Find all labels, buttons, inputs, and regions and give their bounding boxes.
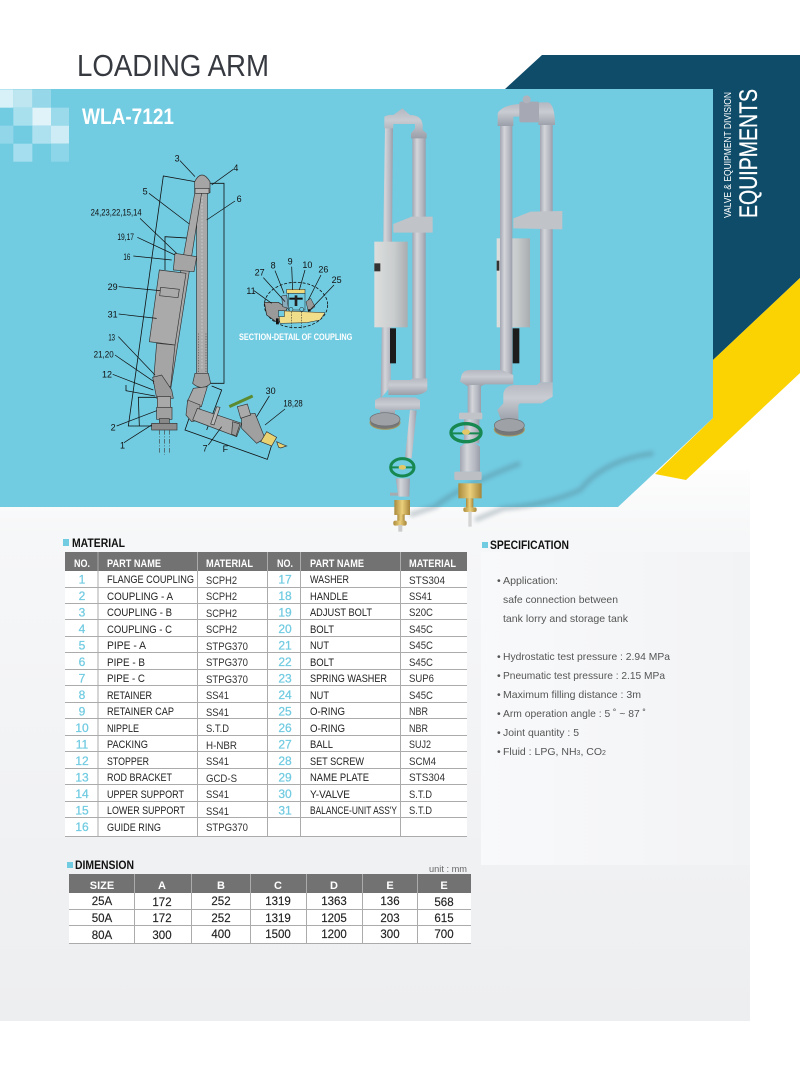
specification list: Pneumatic test pressure : 2.15 MPa <box>503 670 665 682</box>
part number labels: 4 <box>233 163 238 173</box>
column: materials 1-16: H-NBR <box>206 740 237 752</box>
dimension rows: 80A <box>92 930 113 942</box>
table header: MATERIAL <box>206 558 253 570</box>
column: numbers 17-31 <box>278 572 292 818</box>
column: materials 17-31: S20C <box>409 607 433 619</box>
technical drawing of the loading arm <box>91 154 352 459</box>
column: part names 17-31: NUT <box>310 640 329 652</box>
column: numbers 17-31: 23 <box>278 672 292 686</box>
side label: division: VALVE & EQUIPMENT DIVISION <box>722 92 734 218</box>
yellow accent stripe <box>655 278 800 480</box>
column: materials 1-16: GCD-S <box>206 773 237 785</box>
dimension rows: 136 <box>380 896 400 908</box>
column: part names 1-16: COUPLING - C <box>107 624 172 636</box>
dimension table header: C <box>274 880 282 892</box>
part number labels: 16 <box>123 252 130 262</box>
column: materials 1-16: STPG370 <box>206 657 248 669</box>
table header <box>65 552 467 571</box>
column: part names 17-31: HANDLE <box>310 591 348 603</box>
dimension rows: 615 <box>434 913 454 925</box>
unit note: unit : mm <box>429 864 467 875</box>
dimension table header: A <box>158 880 166 892</box>
specification list: Hydrostatic test pressure : 2.94 MPa <box>503 651 670 663</box>
column: part names 1-16: LOWER SUPPORT <box>107 805 185 817</box>
part number labels: 7 <box>203 444 208 454</box>
column: numbers 17-31: 31 <box>278 804 292 818</box>
dimension table header: D <box>330 880 338 892</box>
column: numbers 1-16: 11 <box>76 738 89 752</box>
column: numbers 1-16: 12 <box>75 754 89 768</box>
column: numbers 17-31: 28 <box>278 754 292 768</box>
column: numbers 1-16: 10 <box>75 721 89 735</box>
specification list: • <box>497 746 501 758</box>
dimension rows: 700 <box>434 929 454 941</box>
dimension rows: 1200 <box>321 929 347 941</box>
column: materials 17-31 <box>409 575 445 817</box>
column: numbers 1-16: 4 <box>79 622 86 636</box>
specification list: • <box>497 670 501 682</box>
column: numbers 17-31: 25 <box>278 704 292 718</box>
column: part names 17-31: BALANCE-UNIT ASS'Y <box>310 805 397 817</box>
blue hero panel <box>0 89 713 507</box>
part number labels: 6 <box>237 194 242 204</box>
section detail caption: SECTION-DETAIL OF COUPLING <box>239 332 352 342</box>
part number labels: F <box>223 444 229 454</box>
section detail of coupling <box>264 282 328 328</box>
column: materials 1-16: SS41 <box>206 756 229 768</box>
column: materials 17-31: SS41 <box>409 591 432 603</box>
dimension rows: 1205 <box>321 913 347 925</box>
part number labels: 26 <box>318 265 328 275</box>
model name heading: WLA-7121 <box>82 104 174 129</box>
column: numbers 17-31: 24 <box>278 688 292 702</box>
column: part names 17-31: O-RING <box>310 706 345 718</box>
specification list: • <box>497 689 501 701</box>
part number labels: 8 <box>271 261 276 271</box>
part number labels: 12 <box>102 370 112 380</box>
ground shadows <box>410 453 653 520</box>
dimension table header: E <box>386 880 394 892</box>
part number labels: 2 <box>111 423 116 433</box>
column: materials 17-31: NBR <box>409 706 428 718</box>
column: part names 1-16: FLANGE COUPLING <box>107 574 194 586</box>
column: materials 1-16: SS41 <box>206 690 229 702</box>
table header: PART NAME <box>107 558 161 570</box>
dimension rows: 252 <box>211 896 231 908</box>
table header: NO. <box>74 558 90 570</box>
column: materials 17-31: SUP6 <box>409 673 434 685</box>
column: part names 17-31 <box>310 574 397 817</box>
column: numbers 17-31: 20 <box>278 622 292 636</box>
column: part names 17-31: BALL <box>310 739 333 751</box>
leader lines <box>113 161 334 445</box>
specification list <box>497 575 670 758</box>
column: part names 17-31: BOLT <box>310 657 334 669</box>
column: part names 1-16: COUPLING - B <box>107 607 172 619</box>
specification list: safe connection between <box>503 594 618 606</box>
specification list: Application: <box>503 575 558 587</box>
specification list: Joint quantity : 5 <box>503 727 579 739</box>
page background panel <box>0 470 750 1021</box>
dimension rows: 172 <box>152 913 172 925</box>
column: numbers 1-16: 3 <box>79 606 86 620</box>
material table <box>65 552 467 836</box>
specification list: tank lorry and storage tank <box>503 613 629 625</box>
specification list: Arm operation angle : 5 ˚ ~ 87 ˚ <box>503 708 646 720</box>
column: materials 17-31: SUJ2 <box>409 739 431 751</box>
column: materials 1-16: SCPH2 <box>206 624 237 636</box>
dimension heading: DIMENSION <box>75 858 134 872</box>
specification list: • <box>497 708 501 720</box>
dimension lines <box>126 176 272 459</box>
column: materials 1-16: STPG370 <box>206 822 248 834</box>
column: materials 17-31: STS304 <box>409 575 445 587</box>
part number labels: 3 <box>175 154 180 164</box>
dimension rows <box>92 896 454 942</box>
part number labels: 10 <box>302 260 312 270</box>
column: numbers 17-31: 22 <box>278 655 292 669</box>
dimension table <box>69 874 471 944</box>
part number labels: 27 <box>255 268 265 278</box>
part number labels: 1 <box>120 441 125 451</box>
dimension rows: 50A <box>92 913 113 925</box>
column: materials 1-16: SCPH2 <box>206 608 237 620</box>
part number labels: 13 <box>108 333 115 343</box>
dimension rows: 252 <box>211 913 231 925</box>
column: materials 17-31: S45C <box>409 640 433 652</box>
dimension rows: 400 <box>211 929 231 941</box>
part number labels: 24,23,22,15,14 <box>91 208 142 218</box>
column: part names 1-16: STOPPER <box>107 756 149 768</box>
column: materials 17-31: SCM4 <box>409 756 436 768</box>
column: numbers 17-31: 30 <box>278 787 292 801</box>
column: part names 1-16: GUIDE RING <box>107 822 161 834</box>
table header: PART NAME <box>310 558 364 570</box>
column: part names 1-16: PACKING <box>107 739 148 751</box>
column: part names 17-31: Y-VALVE <box>310 789 350 801</box>
navy corner banner <box>505 55 800 360</box>
dimension rows: 300 <box>152 930 172 942</box>
material heading: MATERIAL <box>72 538 125 550</box>
column: part names 1-16: COUPLING - A <box>107 591 174 603</box>
dimension table header: E <box>440 880 448 892</box>
arm structure <box>149 175 287 448</box>
side label: equipments: EQUIPMENTS <box>735 89 763 218</box>
part number labels: 9 <box>288 257 293 267</box>
column: part names 1-16: RETAINER <box>107 690 152 702</box>
column: part names 1-16: NIPPLE <box>107 723 139 735</box>
part number labels: 18,28 <box>283 399 303 409</box>
column: materials 1-16: SCPH2 <box>206 575 237 587</box>
specification list: Maximum filling distance : 3m <box>503 689 641 701</box>
column: part names 1-16: RETAINER CAP <box>107 706 174 718</box>
dimension rows: 1319 <box>265 896 291 908</box>
column: numbers 1-16: 6 <box>79 655 86 669</box>
column: part names 1-16: ROD BRACKET <box>107 772 172 784</box>
dimension rows: 25A <box>92 896 113 908</box>
column: part names 1-16: PIPE - C <box>107 673 145 685</box>
column: part names 17-31: NAME PLATE <box>310 772 369 784</box>
column: numbers 17-31: 17 <box>278 572 292 586</box>
dimension rows: 1500 <box>265 929 291 941</box>
product photo: two loading arms <box>370 95 653 532</box>
column: part names 17-31: WASHER <box>310 574 349 586</box>
part number labels: 25 <box>332 275 342 285</box>
column: numbers 1-16: 16 <box>75 820 89 834</box>
table header: MATERIAL <box>409 558 456 570</box>
column: numbers 17-31: 26 <box>278 721 292 735</box>
dimension rows: 1363 <box>321 896 347 908</box>
title: LOADING ARM <box>77 48 269 83</box>
part number labels: 11 <box>246 286 256 296</box>
column: materials 1-16: SS41 <box>206 707 229 719</box>
column: part names 1-16 <box>107 574 194 834</box>
column: materials 1-16: SS41 <box>206 806 229 818</box>
column: numbers 17-31: 18 <box>278 589 292 603</box>
dimension rows: 203 <box>380 913 400 925</box>
column: part names 1-16: PIPE - B <box>107 657 145 669</box>
dimension rows: 1319 <box>265 913 291 925</box>
column: materials 17-31: STS304 <box>409 772 445 784</box>
specification list: • <box>497 575 501 587</box>
dimension rows: 568 <box>434 897 454 909</box>
dimension rows: 172 <box>152 897 172 909</box>
column: numbers 17-31: 21 <box>278 638 292 652</box>
column: materials 17-31: S.T.D <box>409 789 432 801</box>
specification list: • <box>497 727 501 739</box>
column: numbers 1-16: 1 <box>79 572 86 586</box>
column: materials 17-31: S.T.D <box>409 805 432 817</box>
column: part names 17-31: BOLT <box>310 624 334 636</box>
specification list: Fluid : LPG, NH3, CO2 <box>503 746 606 758</box>
column: numbers 17-31: 27 <box>278 738 292 752</box>
column: numbers 1-16 <box>75 572 89 834</box>
right arm <box>451 95 562 527</box>
column: materials 17-31: S45C <box>409 657 433 669</box>
decorative mosaic squares <box>0 89 69 162</box>
column: numbers 1-16: 14 <box>75 787 89 801</box>
part number labels: 21,20 <box>94 350 114 360</box>
column: part names 17-31: O-RING <box>310 723 345 735</box>
left arm <box>370 108 433 532</box>
column: numbers 17-31: 19 <box>278 606 292 620</box>
table header: NO. <box>277 558 293 570</box>
column: materials 1-16 <box>206 575 248 834</box>
specification list: • <box>497 651 501 663</box>
column: part names 17-31: NUT <box>310 690 329 702</box>
part number labels: 5 <box>143 187 148 197</box>
column: part names 1-16: UPPER SUPPORT <box>107 789 184 801</box>
column: numbers 1-16: 7 <box>79 672 86 686</box>
column: numbers 1-16: 15 <box>75 804 89 818</box>
part number labels: 31 <box>108 310 118 320</box>
column: numbers 17-31: 29 <box>278 770 292 784</box>
column: materials 17-31: S45C <box>409 690 433 702</box>
part number labels: 29 <box>108 282 118 292</box>
dimension rows: 300 <box>380 929 400 941</box>
column: materials 1-16: SS41 <box>206 789 229 801</box>
column: part names 1-16: PIPE - A <box>107 640 147 652</box>
part number labels: 19,17 <box>117 232 134 242</box>
specification heading: SPECIFICATION <box>490 538 569 552</box>
column: materials 17-31: S45C <box>409 624 433 636</box>
column: materials 1-16: S.T.D <box>206 723 229 735</box>
column: numbers 1-16: 2 <box>79 589 86 603</box>
column: numbers 1-16: 5 <box>79 638 86 652</box>
part number labels <box>91 154 342 454</box>
column: part names 17-31: SPRING WASHER <box>310 673 387 685</box>
dimension table header: B <box>217 880 225 892</box>
column: materials 1-16: SCPH2 <box>206 591 237 603</box>
dimension table header <box>69 874 471 893</box>
column: part names 17-31: SET SCREW <box>310 756 365 768</box>
dimension table header: SIZE <box>90 880 114 892</box>
part number labels: 30 <box>266 386 276 396</box>
column: numbers 1-16: 9 <box>79 704 86 718</box>
column: numbers 1-16: 8 <box>79 688 86 702</box>
column: materials 1-16: STPG370 <box>206 674 248 686</box>
column: part names 17-31: ADJUST BOLT <box>310 607 372 619</box>
specification panel <box>481 552 750 865</box>
column: numbers 1-16: 13 <box>75 770 89 784</box>
column: materials 1-16: STPG370 <box>206 641 248 653</box>
column: materials 17-31: NBR <box>409 723 428 735</box>
